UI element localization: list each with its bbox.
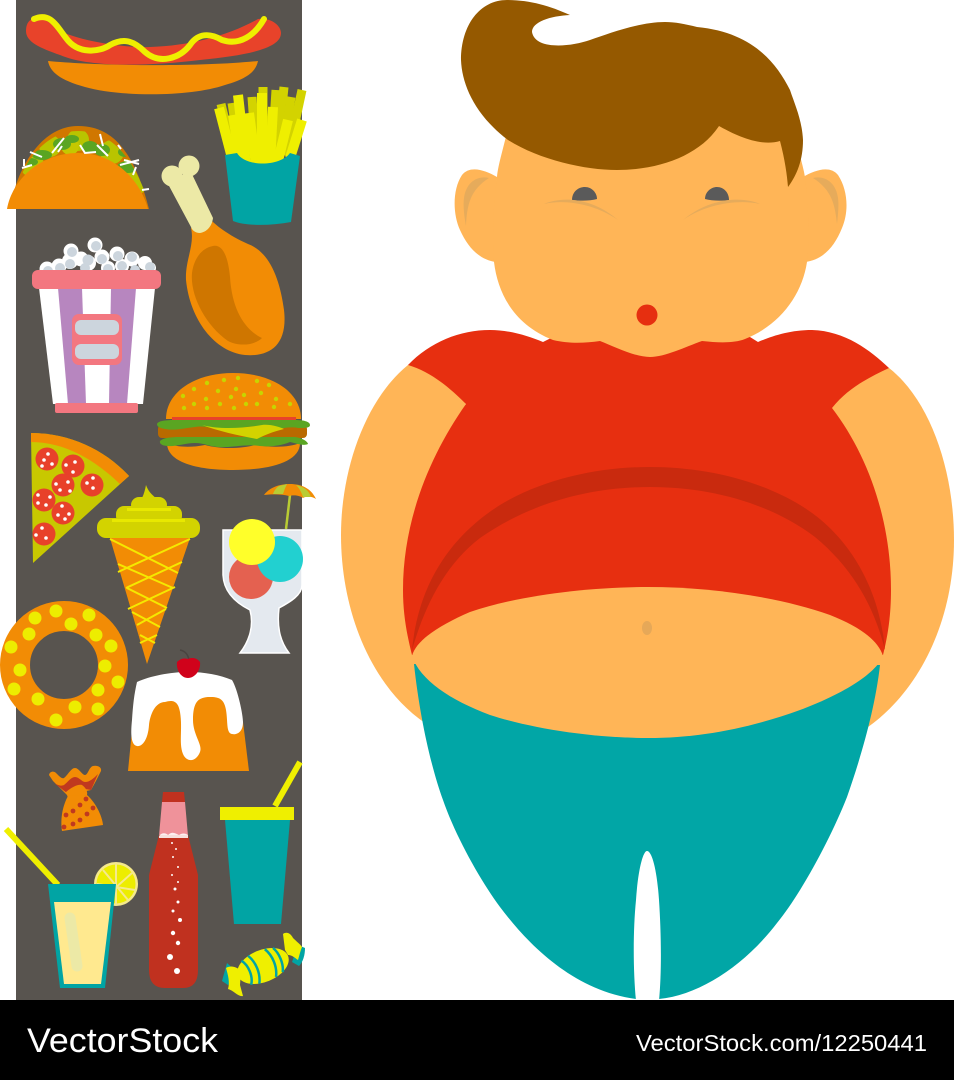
panel: junk food column [4, 0, 316, 1000]
belly button [642, 621, 652, 635]
shirt fold shadow [412, 467, 885, 650]
icon: donut [4, 604, 124, 726]
icon: soda bottle [149, 792, 198, 988]
icon: glass of lemonade [6, 829, 138, 988]
icon: ice cream cone [97, 485, 200, 664]
icon: pizza slice [31, 433, 129, 563]
right ear [803, 169, 847, 262]
mouth [636, 304, 658, 326]
icon: chicken leg [162, 156, 285, 355]
face [493, 120, 808, 357]
icon: ice cream sundae glass [223, 484, 316, 653]
icon: candy in orange wrapper [49, 766, 103, 831]
icon: pudding cake with cherry [128, 650, 249, 771]
icon: taco [7, 126, 149, 209]
hair [461, 0, 803, 187]
head [455, 0, 847, 357]
bare belly [412, 587, 883, 738]
icon: paper cup with straw [220, 762, 300, 924]
footer bar [0, 1000, 954, 1080]
teal trousers [414, 664, 880, 1001]
left eye [544, 187, 618, 220]
icon: hot dog [26, 17, 281, 94]
icon: burger [157, 373, 310, 470]
right eye [683, 187, 760, 220]
left ear [455, 169, 497, 262]
icon: popcorn box [32, 238, 161, 413]
right arm [825, 368, 954, 727]
footer brand: VectorStock [27, 1022, 219, 1060]
icon: french fries [219, 87, 302, 225]
left arm [341, 365, 470, 723]
red t-shirt [403, 330, 891, 655]
icon: cocktail umbrella [264, 484, 316, 529]
footer image url: VectorStock.com/12250441 [636, 1030, 927, 1056]
icon: wrapped candy [222, 933, 305, 996]
figure: overweight boy [341, 0, 954, 1001]
